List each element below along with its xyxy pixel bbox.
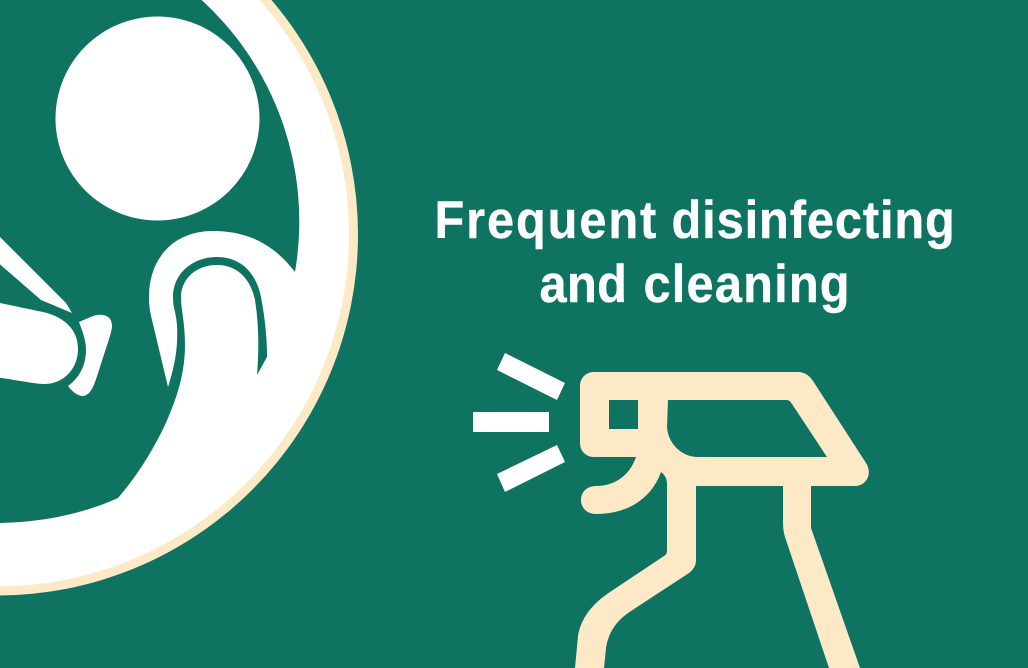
- spray lines: [473, 353, 565, 492]
- head: [56, 16, 260, 220]
- title word: Frequent: Frequent: [434, 190, 656, 249]
- title word: cleaning: cleaning: [644, 254, 850, 313]
- cream outer ring: [0, 0, 358, 596]
- middle spray line: [473, 412, 549, 432]
- needle: [0, 232, 72, 313]
- title: [434, 190, 955, 313]
- upper spray line: [497, 353, 565, 400]
- hand: [0, 302, 78, 384]
- lower spray line: [497, 445, 565, 492]
- green interior with shoulder and arm silhouette: [0, 0, 299, 523]
- icon: person using hand sanitiser in a circle: [0, 0, 358, 596]
- icon: spray bottle: [575, 372, 869, 668]
- white ring: [0, 0, 349, 586]
- title word: disinfecting: disinfecting: [672, 190, 955, 249]
- title word: and: and: [540, 254, 627, 313]
- sanitiser droplet: [68, 315, 112, 396]
